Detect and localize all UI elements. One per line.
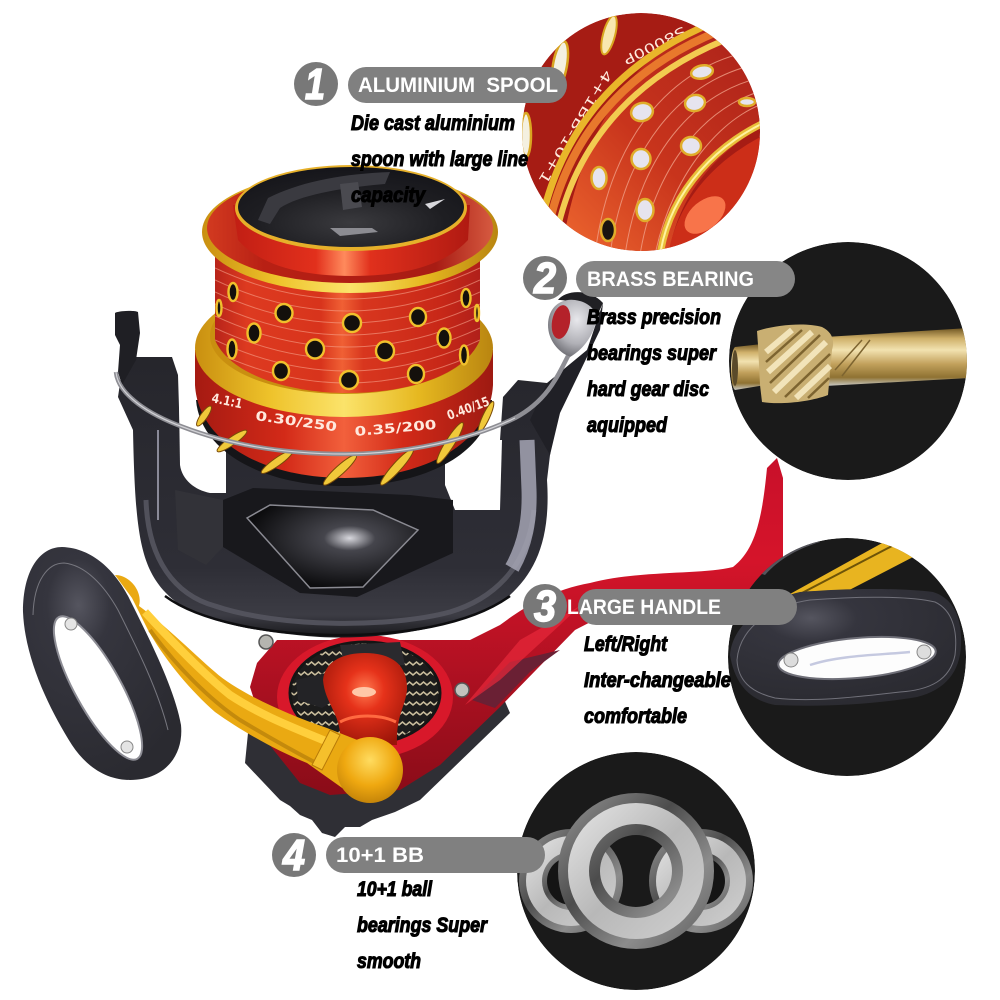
black background: [729, 242, 967, 480]
gold arm dark line: [800, 546, 892, 594]
inner gold line: [660, 124, 760, 250]
grip screw bottom: [121, 741, 133, 753]
reel base: black foot: [245, 690, 510, 837]
bail wire: [116, 356, 568, 454]
description 4: smooth: [357, 950, 421, 973]
description 2: [587, 306, 721, 437]
skirt text: 4.1:1: [210, 391, 244, 412]
description 2: bearings super: [587, 342, 718, 365]
upper flange red: [207, 173, 493, 283]
description 2: aquipped: [587, 414, 668, 437]
leaf mark large: [600, 16, 618, 56]
plate streak: [810, 652, 910, 665]
bail knob red inset: [549, 304, 573, 340]
description 3: Left/Right: [584, 633, 668, 656]
frame glossy edge: [146, 500, 534, 623]
groove area: [566, 30, 760, 251]
heading pill 1: ALUMINIUM SPOOL: [358, 74, 558, 97]
badge 1: [294, 60, 338, 109]
bail knob top: [558, 292, 603, 318]
skirt text: 0.30/250: [254, 409, 338, 435]
crank arm shadow: [150, 630, 320, 765]
second gold band: [558, 40, 722, 222]
hub: [233, 205, 470, 276]
body window highlight: [472, 650, 560, 708]
disc top plate: [340, 642, 405, 668]
upper flange: [202, 171, 498, 293]
grooves: [215, 268, 480, 383]
detail circle 2: brass gear close-up: [729, 242, 970, 480]
illustration: fishing reel: [23, 165, 783, 837]
heading pill 1: [348, 67, 567, 103]
cap ridge: [258, 172, 390, 224]
description 3: [584, 633, 731, 728]
screw left: [784, 653, 798, 667]
rotor frame: [118, 357, 560, 638]
front bearing: [558, 793, 714, 949]
heading pill 3: LARGE HANDLE: [567, 596, 721, 619]
heading pill 2: BRASS BEARING: [587, 268, 754, 291]
cap knob: [340, 182, 362, 210]
stem band: [340, 716, 396, 722]
crank arm: [115, 575, 370, 790]
crank arm highlight: [145, 612, 335, 745]
holes: [216, 283, 479, 389]
white gap left: [179, 402, 226, 493]
housing window: [247, 505, 418, 588]
left bail bracket: [115, 311, 140, 385]
feature 3: large handle: [523, 582, 797, 728]
nose: [731, 344, 760, 390]
spool line body: [215, 250, 480, 393]
reel body: red housing and rod foot: [250, 458, 783, 795]
front bearing face: [568, 803, 704, 939]
outer orange stripe: [549, 32, 714, 215]
badge 3: [523, 582, 567, 631]
screw right: [455, 683, 469, 697]
close-up holes: [592, 63, 755, 221]
gear body: [757, 324, 833, 403]
right bail support: [530, 303, 603, 455]
inner gold band: [657, 121, 760, 250]
lower flange: [195, 279, 493, 417]
cap glint: [425, 199, 445, 209]
grey corner: [762, 542, 820, 575]
housing side shade: [175, 490, 223, 565]
skirt text: [210, 391, 492, 440]
screw right: [917, 645, 931, 659]
frame left arm shine: [157, 430, 159, 520]
lower flange inner: [210, 278, 478, 394]
carbon disc: [290, 642, 440, 744]
shaft: [825, 328, 970, 386]
black background: [517, 752, 755, 990]
crank ball end: [337, 737, 403, 803]
description 3: Inter-changeable: [584, 669, 731, 692]
feature 1: aluminium spool: [294, 60, 567, 207]
description 2: Brass precision: [587, 306, 721, 329]
grip screw top: [65, 618, 77, 630]
badge 3: 3: [534, 582, 556, 631]
leaf mark medium: [551, 40, 570, 78]
black background: [728, 538, 966, 776]
inner red zone: [670, 137, 760, 248]
outer gold band: [543, 26, 704, 207]
description 3: comfortable: [584, 705, 687, 728]
dark hole: [601, 219, 615, 241]
badge 4: [272, 831, 316, 880]
skirt text: 0.35/200: [354, 418, 437, 440]
grip inset line: [33, 563, 168, 730]
spool black rim: [196, 400, 492, 486]
leaf marks: [194, 400, 496, 488]
badge 1: 1: [305, 60, 325, 109]
detail circle 3: handle close-up: [728, 538, 966, 776]
central housing: [223, 488, 453, 597]
handle grip: [23, 547, 181, 780]
shaft flutes: [835, 340, 870, 376]
grip plate: [39, 606, 157, 770]
plate: [777, 636, 937, 680]
helical teeth dark: [766, 330, 830, 398]
left bearing: [519, 829, 623, 933]
spool lower skirt: [195, 350, 493, 478]
heading pill 2: [576, 261, 795, 297]
feature 2: brass bearing: [523, 254, 795, 437]
inner glow: [684, 196, 726, 234]
screw left: [259, 635, 273, 649]
rear red ring: [277, 635, 453, 759]
bail knob: [548, 300, 596, 357]
leaf mark left: [521, 113, 531, 157]
description 2: hard gear disc: [587, 378, 709, 401]
nose hole: [732, 350, 738, 386]
description 1: Die cast aluminium: [351, 112, 515, 135]
heading pill 3: [567, 589, 797, 625]
feature 4: ball bearings: [272, 831, 545, 973]
description 4: [357, 878, 489, 973]
description 1: capacity: [351, 184, 426, 207]
badge 2: 2: [533, 254, 556, 303]
description 1: spoon with large line: [351, 148, 528, 171]
circle background: [522, 13, 760, 251]
wire highlight: [116, 372, 515, 454]
heading pill 4: 10+1 BB: [336, 844, 424, 867]
frame right arm shine: [512, 440, 529, 568]
cap rim: [235, 165, 467, 251]
badge 4: 4: [282, 831, 305, 880]
detail circle 4: ball bearings close-up: [517, 752, 755, 990]
right bearing: [649, 829, 753, 933]
engraved spec: 4+1BB-10+1: [535, 67, 614, 186]
badge 2: [523, 254, 567, 303]
cap highlight: [330, 228, 378, 236]
disc dark plate: [296, 672, 335, 708]
grip: [730, 589, 961, 706]
description 4: bearings Super: [357, 914, 489, 937]
helical teeth light: [766, 330, 830, 398]
gold arm: [790, 543, 912, 594]
description 4: 10+1 ball: [357, 878, 433, 901]
engraved model: S8000P: [620, 22, 688, 67]
detail circle 1: aluminium spool close-up: [522, 13, 760, 251]
grip inset: [737, 597, 956, 700]
stem highlight: [352, 687, 376, 697]
heading pill 4: [326, 837, 545, 873]
frame lower rim: [165, 596, 510, 635]
red highlight stripe: [465, 606, 580, 705]
description 1: [351, 112, 528, 207]
skirt text: 0.40/15: [445, 395, 492, 424]
stem: red crank stem: [323, 653, 407, 745]
crank collar: [312, 730, 340, 770]
white gap right: [445, 440, 502, 510]
black cap: [238, 167, 464, 247]
grooves: [596, 56, 758, 251]
